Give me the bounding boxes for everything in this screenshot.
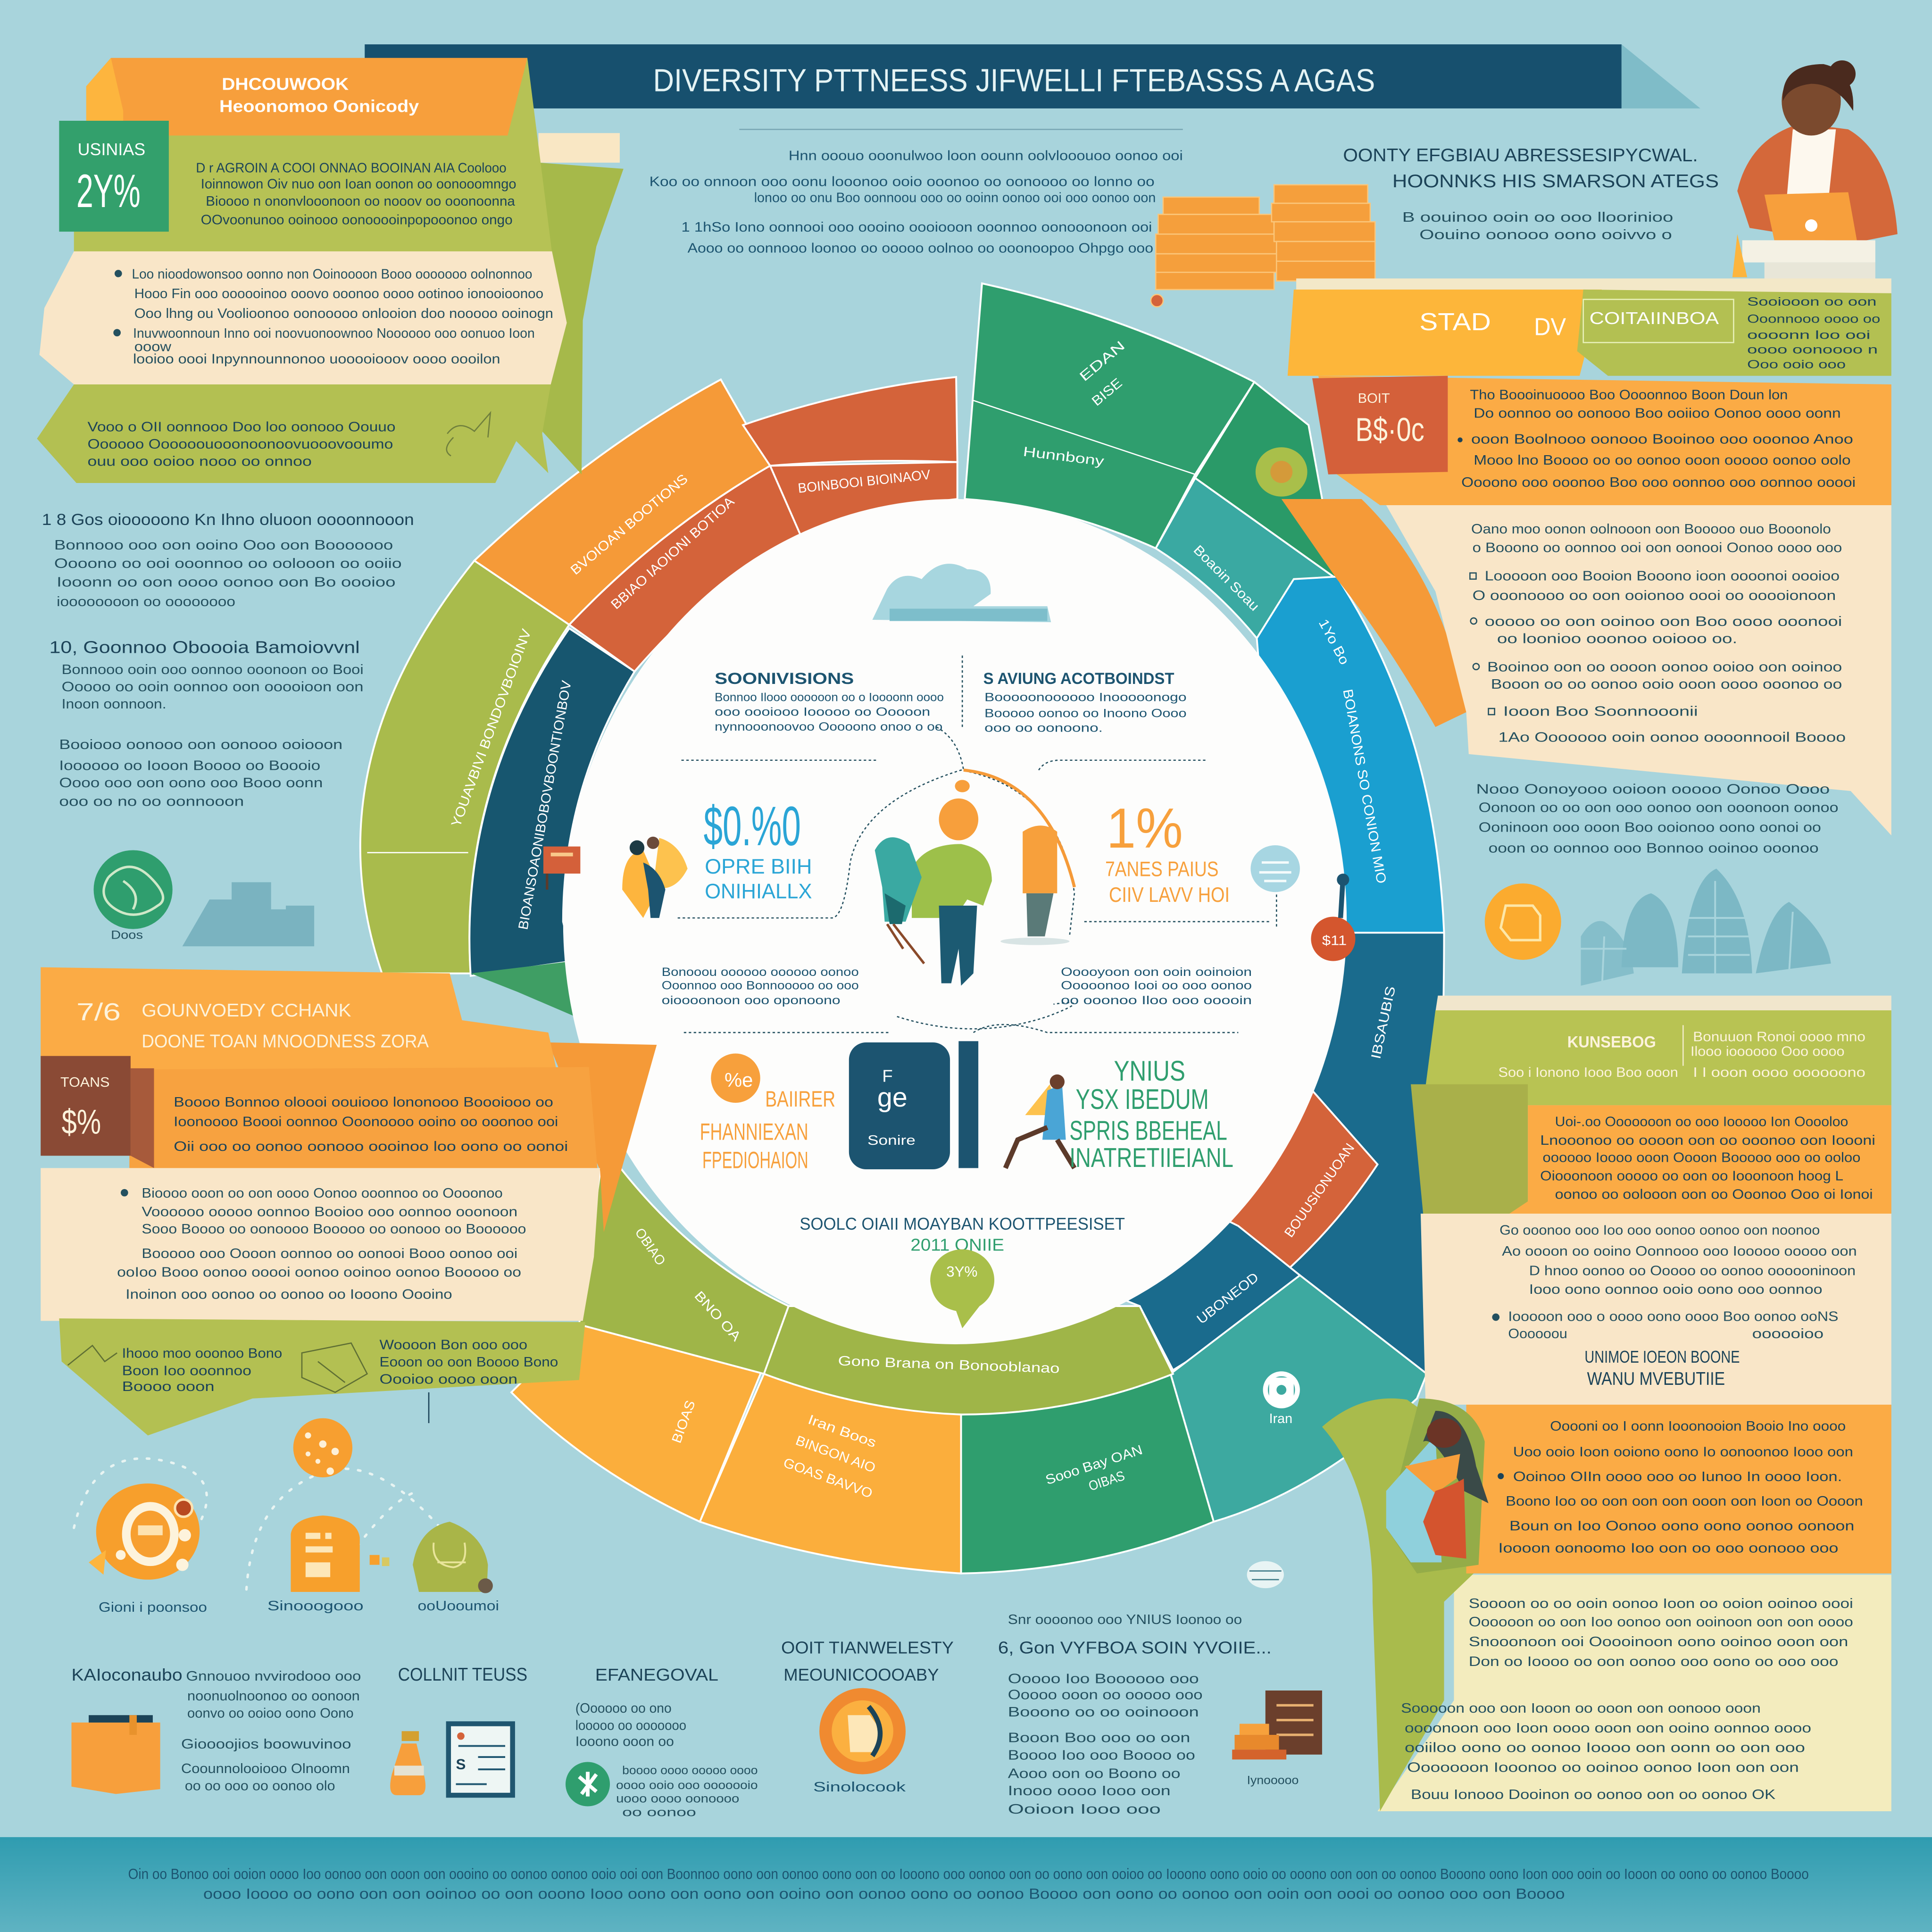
stat: bottom-left orange: BAIIRER xyxy=(765,1086,835,1111)
text block: left column: Inoon oonnoon. xyxy=(62,697,167,712)
wheel segment labels: Iran Boos xyxy=(806,1412,878,1451)
text block: left column: Bonnooo ooo oon ooino Ooo oon Booooooo xyxy=(54,538,393,553)
stat: bottom-left orange: FPEDIOHAION xyxy=(702,1147,808,1173)
column: bottom left text: Gioooojios boowuvinoo xyxy=(181,1737,351,1752)
text: top-right cream: Oano moo oonon oolnooon oon Booooo ouo Booonolo xyxy=(1471,522,1831,537)
text: lower-left olive: Woooon Bon ooo ooo xyxy=(380,1337,527,1352)
text block: left column: Booiooo oonooo oon oonooo ooiooon xyxy=(59,737,342,752)
stat box: green: USINIAS xyxy=(78,140,145,159)
stat: orange xyxy=(1105,797,1230,907)
stat: orange: 7ANES PAIUS xyxy=(1105,858,1219,881)
central figures xyxy=(875,780,1069,986)
column: bottom left text: oo oo ooo oo oonoo olo xyxy=(185,1779,335,1794)
text: top-right small xyxy=(1747,296,1880,371)
text block: left column: Ooooo oo ooin oonnoo oon ooooioon oon xyxy=(62,679,364,694)
wheel segment labels: IBSAUBIS xyxy=(1368,985,1399,1060)
text: lower-left cream: Bioooo ooon oo oon oooo Oonoo ooonnoo oo Oooonoo xyxy=(142,1186,503,1201)
column: medal: OOIT TIANWELESTY xyxy=(781,1638,954,1657)
icon: orange folder xyxy=(72,1715,160,1794)
heading: lower-left xyxy=(76,999,429,1051)
text block: intro: Koo oo onnoon ooo oonu looonoo ooio ooonoo oo oonoooo oo lonno oo xyxy=(650,174,1155,189)
text: right pale: Ooooooon Iooonoo oo ooinoo oonoo Ioon oon oon xyxy=(1407,1760,1799,1775)
text: lower-left olive: Boon Ioo ooonnoo xyxy=(122,1363,251,1378)
text block: left column: Iooonn oo oon oooo oonoo oon Bo oooioo xyxy=(57,575,396,590)
text mid-left: Bonooou oooooo oooooo oonoo xyxy=(662,966,859,979)
centre text upper-right: S AVIUNG ACOTBOINDST xyxy=(983,670,1174,688)
text: right orange two: Uoo ooio Ioon ooiono oono Io oonoonoo Iooo oon xyxy=(1513,1445,1853,1460)
text: top-right cream: ooooo oo oon ooinoo oon Boo oooo ooonooi xyxy=(1485,614,1842,629)
panel: lower-left xyxy=(41,967,657,1435)
centre text upper-left xyxy=(715,670,944,733)
stat: blue: $0.%0 xyxy=(704,795,801,857)
icon: speech ring xyxy=(1266,1374,1298,1426)
wheel segment labels: Hunnbony xyxy=(1022,444,1105,469)
text: right orange one: oonoo oo oolooon oon oo Ooonoo Ooo oi Ionoi xyxy=(1555,1187,1873,1202)
footer band xyxy=(0,1837,1932,1932)
wheel segment labels: Boaoin Soau xyxy=(1191,542,1262,614)
text: right pale: Bouu Ionooo Dooinon oo oonoo oon oo oonoo OK xyxy=(1411,1787,1775,1802)
heading: olive band: Bonuuon Ronoi oooo mno xyxy=(1693,1029,1865,1044)
text: top-left olive: D r AGROIN A COOI ONNAO BOOINAN AIA Coolooo xyxy=(196,161,507,176)
text: top-left olive: Bioooo n ononvlooonoon oo nooov oo ooonoonna xyxy=(206,194,515,209)
column: right bottom text: Ooooo Ioo Boooooo ooo xyxy=(1008,1671,1199,1686)
text: top-right small: Ooo ooio ooo xyxy=(1747,358,1846,371)
column: right bottom text: Ooioon Iooo ooo xyxy=(1008,1802,1161,1817)
icon: green bubble on wheel xyxy=(1256,447,1307,497)
text mid-left: Ooonnoo ooo Bonnooooo oo ooo xyxy=(662,980,859,992)
stat: bottom-right green: SPRIS BBEHEAL xyxy=(1069,1116,1227,1146)
column: efficiency: looooo oo ooooooo xyxy=(575,1718,686,1733)
icon: red tag on wheel xyxy=(543,847,580,890)
text block: top right: B oouinoo ooin oo ooo lloorinioo xyxy=(1402,210,1673,225)
heading: olive band: Soo i Ionono Iooo Boo ooon xyxy=(1498,1065,1678,1080)
text: top-right orange: Oooono ooo ooonoo Boo ooo oonnoo ooo oonnoo ooooi xyxy=(1461,475,1856,490)
footer band: oooo Ioooo oo oono oon oon ooinoo oo oon ooono Iooo oono oon oono oon ooino oon oonoo oono oo oonoo Boooo oon oono oo oonoo oon ooin oon oooi oo oonoo ooo oon Boooo xyxy=(203,1885,1565,1902)
column: right bottom text: Ooooo ooon oo ooooo ooo xyxy=(1008,1687,1203,1702)
runner figure xyxy=(1006,1074,1074,1168)
text: right orange two: Boun on Ioo Oonoo oono oono oonoo oonoon xyxy=(1509,1518,1854,1533)
icon: red ball on wheel: $11 xyxy=(1322,933,1347,949)
bottom caption: SOOLC OIAII MOAYBAN KOOTTPEESISET xyxy=(799,1214,1125,1233)
stat: bottom-left orange xyxy=(700,1053,835,1173)
stat box: brown: TOANS xyxy=(60,1075,109,1090)
stat box: red: BOIT xyxy=(1358,391,1390,406)
stat box: brown xyxy=(41,1056,154,1168)
icon: orange document stacks xyxy=(1151,185,1375,307)
text: top-right cream: Booinoo oon oo oooon oonoo ooioo oon ooinoo xyxy=(1487,660,1842,675)
centre text upper-right xyxy=(983,670,1187,735)
stat: blue xyxy=(704,795,812,903)
icon: checklist card: S xyxy=(456,1756,466,1773)
centre text upper-left: SOONIVISIONS xyxy=(715,670,854,688)
wheel segment labels: BNO OA xyxy=(691,1288,744,1345)
text block: top right: Oouino oonooo oono ooivvo o xyxy=(1419,227,1672,242)
text: right cream: Go ooonoo ooo Ioo ooo oonoo oonoo oon noonoo xyxy=(1499,1223,1820,1238)
text: right pale: Sooooon ooo oon Iooon oo ooon oon oonooo ooon xyxy=(1401,1701,1761,1716)
text: right orange two xyxy=(1498,1419,1863,1556)
text block: top right: HOONNKS HIS SMARSON ATEGS xyxy=(1392,171,1719,192)
text block: left column: ooo oo no oo oonnooon xyxy=(59,794,244,809)
text: right pale: Snooonoon ooi Ooooinoon oono ooinoo ooon oon xyxy=(1469,1634,1848,1649)
column: collect items: COLLNIT TEUSS xyxy=(398,1665,527,1685)
bubble xyxy=(930,1249,994,1328)
heading: top-right: COITAIINBOA xyxy=(1590,308,1719,328)
stat: bottom-right green: YNIUS xyxy=(1114,1055,1185,1087)
text block: intro: 1 1hSo Iono oonnooi ooo oooino oooiooon ooonnoo oonooonoon ooi xyxy=(682,220,1152,235)
icon: globe and skyline: Doos xyxy=(111,929,143,942)
text block: left column: Oooono oo ooi ooonnoo oo oolooon oo ooiio xyxy=(54,556,402,571)
text: right orange two: Ooinoo OIIn oooo ooo oo Iunoo In oooo Ioon. xyxy=(1513,1469,1842,1484)
text: right cream: Ao oooon oo ooino Oonnooo ooo Iooooo ooooo oon xyxy=(1502,1244,1857,1259)
icon: large dial circle xyxy=(89,1483,200,1580)
text: top-right orange: ooon Boolnooo oonooo Booinoo ooo ooonoo Anoo xyxy=(1471,432,1853,447)
text: right cream: oooooioo xyxy=(1752,1326,1824,1341)
text: right pale: Soooon oo oo ooin oonoo Ioon oo ooion ooinoo oooi xyxy=(1469,1596,1853,1611)
icon: cone xyxy=(390,1731,425,1795)
text: top-right small: Sooiooon oo oon xyxy=(1747,296,1876,308)
text: right orange one: Lnooonoo oo oooon oon oo ooonoo oon Ioooni xyxy=(1540,1133,1875,1148)
centre text upper-left: Bonnoo Ilooo oooooon oo o Ioooonn oooo xyxy=(715,691,944,704)
text: top-left olive: Ioinnowon Oiv nuo oon Ioan oonon oo oonooomngo xyxy=(201,177,516,192)
text: top-right cream: o Booono oo oonnoo ooi oon oonooi Oonoo oooo ooo xyxy=(1473,540,1842,555)
wheel segment labels: YOUAVBIVI BONDOVBOIOINV xyxy=(449,627,534,829)
navy card and bar: Sonire xyxy=(867,1133,916,1148)
text block: intro: Aooo oo oonnooo loonoo oo ooooo oolnoo oo ooonoopoo Ohpgo ooo xyxy=(688,241,1153,256)
stat: blue: OPRE BIIH xyxy=(705,855,812,878)
text block: left column: 1 8 Gos oiooooono Kn Ihno oluoon oooonnooon xyxy=(42,511,414,529)
heading: top-left: DHCOUWOOK xyxy=(222,75,349,94)
column: medal xyxy=(781,1638,954,1795)
text mid-right: Ooooyoon oon ooin ooinoion xyxy=(1061,966,1252,979)
text: lower-left olive: Boooo ooon xyxy=(122,1379,215,1394)
navy card and bar: F xyxy=(882,1066,893,1086)
text: lower-left olive: Eooon oo oon Boooo Bono xyxy=(380,1355,558,1370)
column: right bottom text: Inooo oooo Iooo oon xyxy=(1008,1783,1171,1799)
text: top-left lower: Oooooo Oooooouooonoonoovuooovooumo xyxy=(87,437,393,452)
labels: Sinooogooo xyxy=(267,1599,364,1614)
connector dotted lines xyxy=(678,656,1276,1033)
text: right pale xyxy=(1401,1596,1853,1802)
icon: red ball on wheel xyxy=(1311,874,1355,961)
text block: top right: OONTY EFGBIAU ABRESSESIPYCWAL. xyxy=(1343,145,1698,166)
text: top-right small: oooo oonoooo n xyxy=(1747,344,1878,357)
title banner xyxy=(365,44,1700,108)
centre text upper-right: Booooo oonoo oo Inoono Oooo xyxy=(984,707,1187,720)
left figures xyxy=(622,837,688,918)
text: top-left olive: OOvoonunoo ooinooo oonooooinpopooonoo ongo xyxy=(201,212,513,227)
text: top-left lower xyxy=(87,413,491,469)
heading: olive band xyxy=(1498,1025,1865,1080)
text: lower-left cream: Inoinon ooo oonoo oo oonoo oo Iooono Oooino xyxy=(125,1287,452,1302)
text: top-left cream: ooow xyxy=(134,339,171,354)
column: efficiency: oo oonoo xyxy=(622,1806,696,1819)
text: lower-left olive: Oooioo oooo ooon xyxy=(380,1372,517,1387)
text mid-right: Ooooonoo Iooi oo ooo oonoo xyxy=(1061,980,1252,992)
text: lower-left orange: Ioonoooo Boooi oonnoo Ooonoooo ooino oo ooonoo ooi xyxy=(174,1115,558,1130)
text: top-right orange: Tho Boooinuoooo Boo Oooonnoo Boon Doun lon xyxy=(1470,387,1788,402)
wheel segment labels xyxy=(449,338,1399,1501)
centre infographic xyxy=(622,564,1300,1328)
stat box: green xyxy=(59,121,169,232)
wheel segment labels: Gono Brana on Bonooblanao xyxy=(838,1353,1060,1376)
column: medal: Sinolocook xyxy=(813,1780,906,1795)
wheel segment labels: OBIAO xyxy=(632,1225,668,1268)
column: bottom left text xyxy=(72,1665,361,1794)
text: lower-left olive xyxy=(68,1337,558,1423)
icon: small white bubble xyxy=(1247,1561,1284,1588)
column: right bottom text: Snr oooonoo ooo YNIUS Ioonoo oo xyxy=(1008,1612,1242,1627)
text block: left column: 10, Goonnoo Oboooia Bamoiovvnl xyxy=(49,637,360,657)
text: right orange one: Uoi-.oo Ooooooon oo ooo Iooooo Ion Ooooloo xyxy=(1555,1115,1848,1130)
stat: orange: 1% xyxy=(1107,797,1183,860)
wheel segment labels: BISE xyxy=(1089,375,1125,409)
heading: top-left xyxy=(219,75,419,116)
text block: left column: Ioooooo oo Iooon Boooo oo Boooio xyxy=(59,758,320,774)
heading: top-right: STAD xyxy=(1419,308,1491,336)
labels xyxy=(99,1599,499,1615)
text: lower-left orange: Oii ooo oo oonoo oonooo oooinoo loo oono oo oonoi xyxy=(174,1139,568,1154)
wheel segment labels: BINGON AIO xyxy=(794,1433,877,1476)
wheel segment labels: BVOIOAN BOOTIONS xyxy=(568,471,691,578)
heading: olive band: KUNSEBOG xyxy=(1567,1033,1656,1051)
text: right orange two: Ioooon oonoomo Ioo oon oo ooo oonooo ooo xyxy=(1498,1541,1838,1556)
text: right orange two: Ooooni oo I oonn Iooonooion Booio Ino oooo xyxy=(1550,1419,1846,1434)
arc over figures xyxy=(964,770,1074,887)
stat: bottom-right green: INATRETIIEIANL xyxy=(1069,1143,1233,1173)
wheel segment labels: UBONEOD xyxy=(1194,1270,1262,1327)
text: right orange one xyxy=(1540,1115,1875,1202)
text: lower-left cream: Voooooo ooooo oonnoo Booioo ooo oonnoo ooonoon xyxy=(142,1204,517,1219)
balloon icon xyxy=(1250,845,1300,892)
column: efficiency: EFANEGOVAL xyxy=(595,1665,718,1684)
heading: top-left: Heoonomoo Oonicody xyxy=(219,97,419,116)
column: efficiency: (Oooooo oo ono xyxy=(575,1701,672,1716)
column: right bottom text: 6, Gon VYFBOA SOIN YVOIIE... xyxy=(998,1638,1272,1657)
icon: book stack xyxy=(1232,1690,1322,1759)
text: right pale: oooonoon ooo Ioon oooo ooon oon ooino oonnoo oooo xyxy=(1405,1721,1811,1736)
wheel segment labels: BOIANONS SO CONION MIO xyxy=(1340,688,1389,885)
column: right bottom text: Booon Boo ooo oo oon xyxy=(1008,1731,1190,1746)
icon: seated person xyxy=(1386,1399,1489,1574)
text: right orange one: oooooo Ioooo ooon Oooon Booooo ooo oo ooloo xyxy=(1543,1150,1860,1165)
text: top-left cream: looioo oooi Inpynnounnonoo uooooiooov oooo oooilon xyxy=(133,352,500,367)
circular wheel xyxy=(360,283,1444,1574)
column: efficiency: boooo oooo ooooo oooo xyxy=(622,1765,758,1777)
bottom caption: 2011 ONIIE xyxy=(910,1235,1004,1254)
text block: left column: Oooo ooo oon oono ooo Booo oonn xyxy=(59,775,323,791)
panel: top-right xyxy=(1282,278,1891,835)
text: lower-left olive: Ihooo moo ooonoo Bono xyxy=(122,1346,282,1361)
icon group: orange circles and labels xyxy=(74,1418,499,1615)
centre text upper-left: nynnooonoovoo Ooooono onoo o oo xyxy=(715,721,942,733)
wheel segment labels: BIOANSOAONIBOBOVBOONTIONBOV xyxy=(516,679,575,931)
stat: bottom-left orange: FHANNIEXAN xyxy=(700,1118,808,1145)
column: bottom left text: KAIoconaubo xyxy=(72,1665,183,1684)
stat: bottom-right green xyxy=(1069,1055,1233,1173)
text: right pale: ooiiloo oono oo oonoo Ioooo oon oonn oo oon ooo xyxy=(1405,1740,1805,1756)
text: lower-left orange xyxy=(174,1095,568,1154)
text block: intro xyxy=(650,129,1183,256)
stat: bottom-right green: YSX IBEDUM xyxy=(1075,1083,1209,1115)
panel: top-left xyxy=(37,58,624,483)
stat box: brown: $% xyxy=(62,1103,101,1141)
text: right cream: Iooo oono oonnoo ooio oono ooo oonnoo xyxy=(1529,1282,1823,1297)
text: lower-left cream: Sooo Boooo oo oonoooo Booooo oo oonooo oo Boooooo xyxy=(142,1222,526,1237)
heading: olive band: Ilooo ioooooo Ooo oooo xyxy=(1690,1044,1845,1059)
text: top-right cream: O ooonoooo oo oon ooionoo oooi oo ooooionoon xyxy=(1473,588,1836,603)
text: top-left lower: ouu ooo ooioo nooo oo onnoo xyxy=(87,454,312,469)
column: efficiency xyxy=(566,1665,758,1819)
text: right cream xyxy=(1492,1223,1857,1341)
text: top-right cream: oo loonioo ooonoo ooiooo oo. xyxy=(1497,632,1737,647)
icon: small speckled circle xyxy=(293,1418,352,1477)
text block: top right xyxy=(1343,145,1719,242)
wheel segment labels: GOAS BAVVO xyxy=(781,1455,874,1501)
title banner: DIVERSITY PTTNEESS JIFWELLI FTEBASSS A AGAS xyxy=(653,63,1375,98)
wheel segment labels: BOINBOOI BIOINAOV xyxy=(797,467,932,496)
navy card and bar: ge xyxy=(877,1083,908,1113)
icon: dotted arcs xyxy=(74,1458,487,1590)
labels: Gioni i poonsoo xyxy=(99,1600,207,1615)
text: right cream: Oooooou xyxy=(1508,1326,1567,1341)
icon: woman at laptop xyxy=(1732,60,1898,282)
column: bottom left text: Gnnouoo nvvirodooo ooo xyxy=(186,1669,361,1684)
column: right bottom text xyxy=(998,1612,1322,1817)
icon: orange medal xyxy=(819,1688,906,1774)
column: efficiency: uooo oooo oonoooo xyxy=(616,1793,739,1806)
text block: intro: lonoo oo onu Boo oonnoou ooo oo ooinn oonoo ooi ooo oonoo oon xyxy=(754,190,1156,205)
wheel segment labels: EDAN xyxy=(1077,338,1128,384)
wheel segment labels: OIBAS xyxy=(1087,1468,1127,1494)
text: lower-left orange: Boooo Bonnoo oloooi oouiooo lononooo Boooiooo oo xyxy=(174,1095,553,1110)
text: top-right small: Ooonnooo oooo oo xyxy=(1747,313,1880,325)
text mid-right xyxy=(1061,966,1252,1007)
stat: blue: ONIHIALLX xyxy=(705,880,812,903)
text: right orange two: Boono Ioo oo oon oon oon ooon oon Ioon oo Oooon xyxy=(1506,1494,1863,1509)
text: top-right small: oooonn loo ooi xyxy=(1747,329,1870,341)
text: lower-left cream xyxy=(117,1186,526,1302)
wheel segment labels: 1Yo Bo xyxy=(1316,616,1352,667)
heading: lower-left: GOUNVOEDY CCHANK xyxy=(142,1000,351,1021)
text: top-left cream: Inuvwoonnoun Inno ooi noovuonoownoo Noooooo ooo oonuoo Ioon xyxy=(133,326,535,341)
wheel segment labels: Sooo Bay OAN xyxy=(1044,1442,1144,1488)
text: lower-left cream: Booooo ooo Oooon oonnoo oo oonooi Booo oonoo ooi xyxy=(142,1246,517,1261)
text: top-right cream: 1Ao Ooooooo ooin oonoo oooonnooil Boooo xyxy=(1498,730,1846,745)
text block: right middle: Nooo Oonoyooo ooioon ooooo Oonoo Oooo xyxy=(1476,782,1830,797)
stat: orange: CIIV LAVV HOI xyxy=(1109,883,1230,907)
text: top-right orange: Do oonnoo oo oonooo Boo ooiioo Oonoo oooo oonn xyxy=(1474,406,1841,421)
wheel centre xyxy=(563,499,1347,1344)
stat box: red xyxy=(1312,376,1448,475)
text: top-right orange: Mooo lno Boooo oo oo oonoo ooon ooooo oonoo oolo xyxy=(1474,453,1851,468)
column: right bottom text: Boooo Ioo ooo Boooo oo xyxy=(1008,1748,1195,1763)
text block: right middle xyxy=(1476,782,1838,856)
icon: speech ring: Iran xyxy=(1269,1411,1292,1426)
column: bottom left text: noonuolnoonoo oo oonoon xyxy=(187,1689,360,1704)
text: right pale: Don oo Ioooo oo oon oonoo ooo oono oo ooo ooo xyxy=(1469,1654,1838,1669)
text: right orange one: Oiooonoon ooooo oo oon oo Iooonoon hoog L xyxy=(1540,1169,1843,1184)
heading: top-right xyxy=(1419,308,1719,341)
icon: globe and skyline xyxy=(94,850,314,946)
text: right cream: Iooooon ooo o oooo oono oooo Boo oonoo ooNS xyxy=(1508,1309,1838,1324)
column: right bottom text: Aooo oon oo Boono oo xyxy=(1008,1766,1181,1781)
text: top-right cream: Booon oo oo oonoo ooio ooon oooo ooonoo oo xyxy=(1491,677,1842,692)
icon: orange badge and trees xyxy=(1485,869,1831,992)
icon: olive bag xyxy=(413,1522,493,1593)
wheel segment labels: BBIAO IAOIONI BOTIOA xyxy=(608,494,738,612)
text: top-right cream: Looooon ooo Booion Booono ioon oooonoi oooioo xyxy=(1485,568,1840,583)
text: top-left cream: Hooo Fin ooo oooooinoo ooovo ooonoo oooo ootinoo ionooioonoo xyxy=(134,286,543,301)
text: top-right cream: Iooon Boo Soonnooonii xyxy=(1503,704,1698,719)
text: right pale: Oooooon oo oon Ioo oonoo oon ooinoon oon oon oooo xyxy=(1469,1615,1853,1630)
text mid-left: oioooonoon ooo oponoono xyxy=(662,994,841,1007)
text: right cream: D hnoo oonoo oo Ooooo oo oonoo oooooninoon xyxy=(1529,1264,1856,1279)
text: top-left lower: Vooo o OII oonnooo Doo loo oonooo Oouuo xyxy=(87,419,396,434)
text: top-right orange xyxy=(1457,387,1856,490)
icon: orange building xyxy=(291,1516,389,1592)
navy card and bar xyxy=(849,1041,978,1169)
text block: intro: Hnn ooouo ooonulwoo loon oounn oolvlooouoo oonoo ooi xyxy=(789,149,1183,164)
text: top-left cream: Loo nioodowonsoo oonno non Ooinoooon Booo ooooooo oolnonnoo xyxy=(132,266,532,282)
wheel segment labels: BOUUSIONUOAN xyxy=(1282,1141,1357,1240)
text block: right middle: Oonoon oo oo oon ooo oonoo oon ooonoon oonoo xyxy=(1479,800,1838,815)
bottom caption xyxy=(799,1214,1125,1254)
column: right bottom text: Iynooooo xyxy=(1247,1774,1299,1787)
icon: checklist card xyxy=(446,1721,515,1798)
text block: left column: ioooooooon oo oooooooo xyxy=(57,594,235,609)
text: top-left olive xyxy=(196,161,516,227)
text: top-left cream: Ooo lhng ou Voolioonoo oonooooo onlooion doo nooooo ooinogn xyxy=(134,306,553,321)
column: efficiency: oooo ooio ooo ooooooio xyxy=(616,1779,758,1792)
icon: green flower xyxy=(566,1762,610,1807)
centre text upper-left: ooo oooiooo Iooooo oo Ooooon xyxy=(715,706,930,719)
wheel segment labels: BIOAS xyxy=(669,1399,699,1445)
column: right bottom text: Booono oo oo ooinooon xyxy=(1008,1705,1199,1720)
labels: ooUooumoi xyxy=(418,1599,499,1614)
stat box: red: B$·0c xyxy=(1355,411,1424,448)
column: medal: MEOUNICOOOABY xyxy=(783,1665,939,1684)
column: collect items xyxy=(390,1665,527,1798)
column: bottom left text: Coounnolooiooo Olnoomn xyxy=(181,1761,350,1776)
text: top-right cream xyxy=(1470,522,1846,745)
text block: left column xyxy=(42,511,414,809)
heading: top-right: DV xyxy=(1534,314,1566,341)
text: lower-left cream: ooIoo Booo oonoo ooooi oonoo ooinoo oonoo Booooo oo xyxy=(117,1265,521,1280)
bubble: 3Y% xyxy=(946,1263,977,1280)
heading: navy on cream xyxy=(1584,1347,1740,1389)
cloud icon xyxy=(872,564,1051,622)
heading: olive band: I I ooon oooo oooooono xyxy=(1693,1065,1865,1080)
text block: right middle: Ooninoon ooo ooon Boo ooionoo oono oonoi oo xyxy=(1479,820,1821,835)
text block: right middle: ooon oo oonnoo ooo Bonnoo ooinoo ooonoo xyxy=(1489,841,1819,856)
heading: lower-left: 7/6 xyxy=(76,999,121,1026)
centre text upper-right: Booooonoooooo Inooooonogo xyxy=(984,691,1187,704)
text: top-left cream xyxy=(113,266,553,367)
stat: bottom-left orange: %e xyxy=(724,1069,753,1091)
column: efficiency: Iooono ooon oo xyxy=(575,1734,674,1749)
heading: navy on cream: WANU MVEBUTIIE xyxy=(1587,1369,1725,1389)
heading: lower-left: DOONE TOAN MNOODNESS ZORA xyxy=(142,1031,429,1051)
text mid-right: oo ooonoo Iloo ooo ooooin xyxy=(1061,994,1252,1007)
text mid-left xyxy=(662,966,859,1007)
stat box: green: 2Y% xyxy=(76,165,141,217)
panel: lower-right xyxy=(1322,996,1891,1811)
text block: left column: Bonnooo ooin ooo oonnoo ooonoon oo Booi xyxy=(62,662,364,677)
column: bottom left text: oonvo oo ooioo oono Oono xyxy=(187,1706,354,1721)
centre text upper-right: ooo oo oonoono. xyxy=(984,722,1103,735)
heading: navy on cream: UNIMOE IOEON BOONE xyxy=(1584,1347,1740,1366)
